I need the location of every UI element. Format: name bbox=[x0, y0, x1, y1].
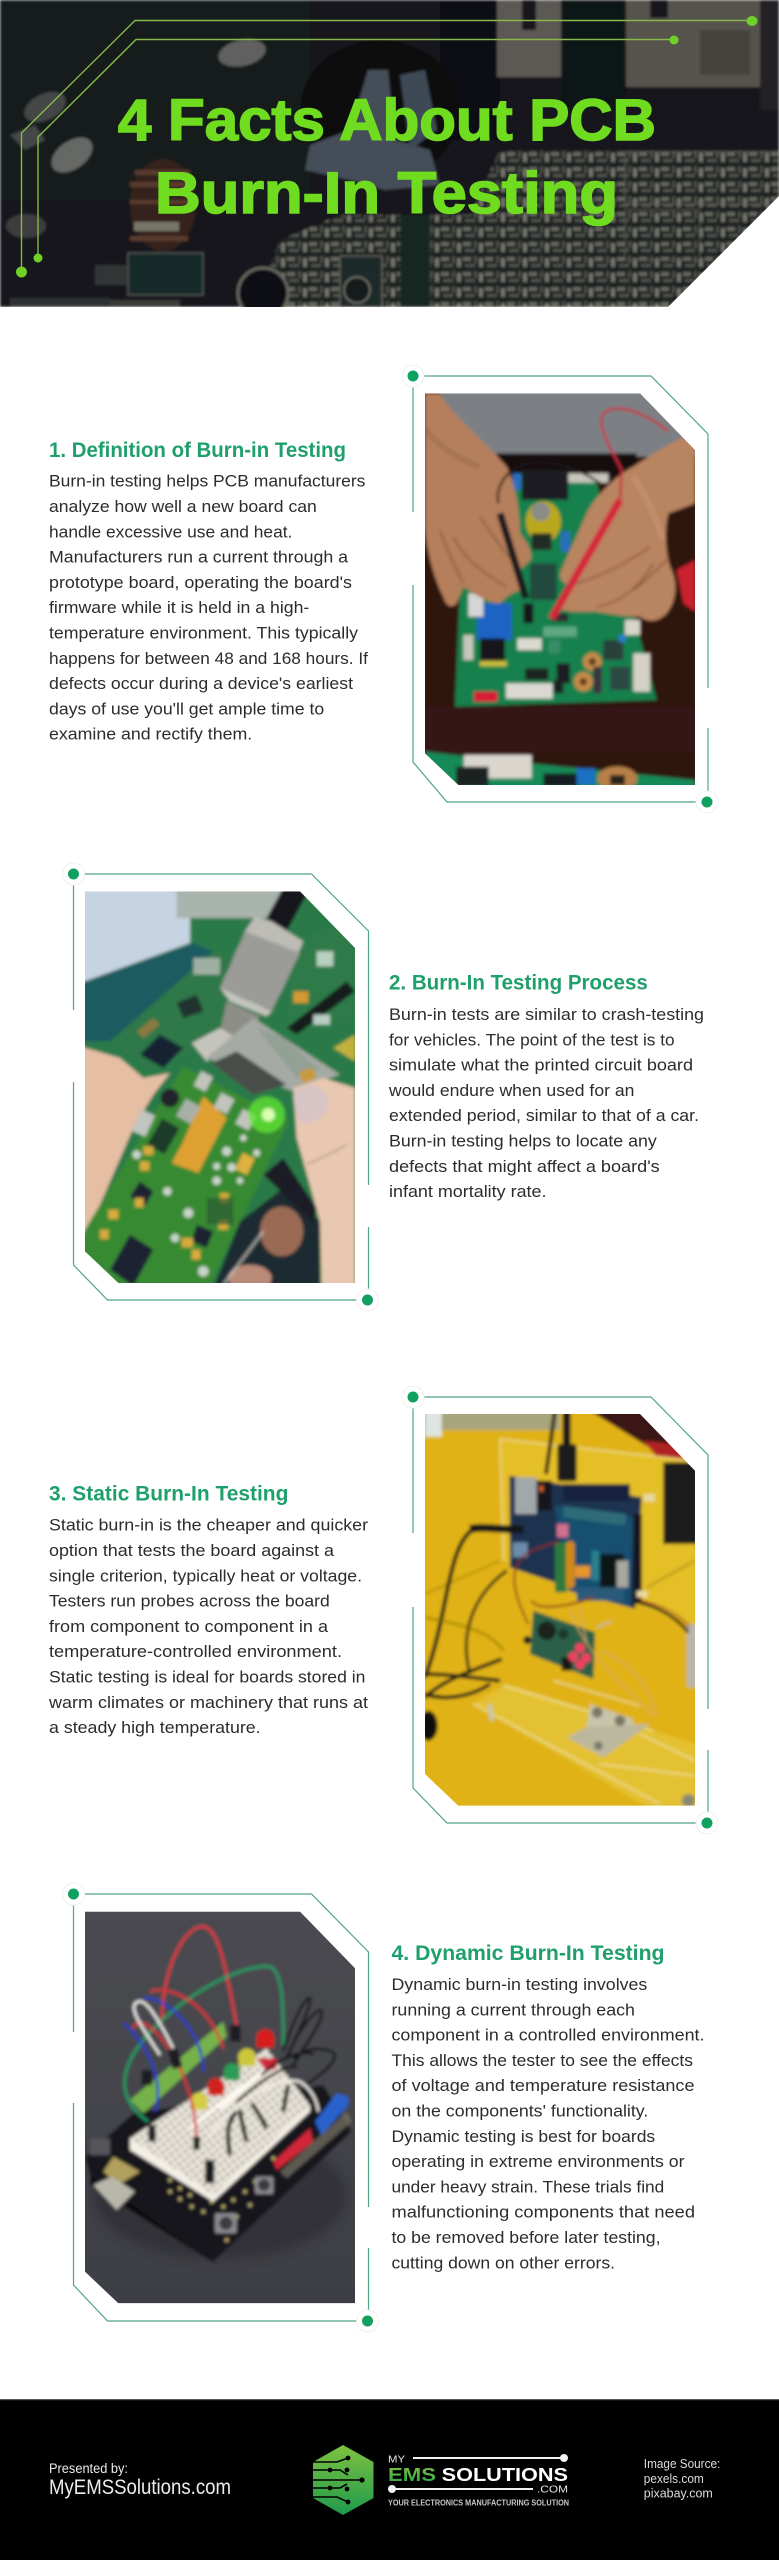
section 3 body text: Static testing is ideal for boards stored in bbox=[49, 1668, 365, 1686]
panel: section 3 static bbox=[48, 1386, 718, 1834]
section 4 body text: of voltage and temperature resistance bbox=[392, 2077, 694, 2095]
section 1 heading: 1. Definition of Burn-in Testing bbox=[49, 439, 346, 462]
section 4 body text bbox=[392, 1976, 704, 2272]
section 4 circuit frame bbox=[62, 1883, 378, 2332]
photo: test board mounted on acrylic over yellow surface bbox=[419, 1411, 700, 1811]
header circuit trace lines bbox=[22, 20, 752, 272]
tan wires bbox=[570, 1607, 656, 1716]
board bbox=[455, 473, 657, 707]
section 4 heading: 4. Dynamic Burn-In Testing bbox=[392, 1942, 664, 1965]
image source block: pexels.com bbox=[644, 2471, 704, 2486]
red probe bbox=[552, 500, 620, 618]
black wires right bbox=[237, 1998, 335, 2102]
logo wordmark: EMS bbox=[388, 2465, 436, 2485]
inductor coil bbox=[130, 159, 196, 251]
connector bbox=[277, 888, 297, 925]
section 2 body text bbox=[388, 1006, 704, 1201]
breadboard bbox=[130, 2048, 310, 2198]
logo icon: green hexagon with circuit traces bbox=[313, 2445, 374, 2515]
PCB bbox=[80, 1066, 288, 1288]
section 2 body text: infant mortality rate. bbox=[389, 1183, 546, 1201]
jumper connectors bbox=[230, 2025, 241, 2042]
image source block: Image Source: bbox=[644, 2456, 720, 2471]
section 2 body text: defects that might affect a board's bbox=[389, 1158, 660, 1176]
section 1 body text: analyze how well a new board can bbox=[49, 498, 317, 516]
section 3 body text: Testers run probes across the board bbox=[49, 1593, 330, 1611]
gold pads bbox=[168, 2156, 275, 2242]
section 1 body text bbox=[49, 473, 368, 744]
image source block bbox=[644, 2456, 720, 2501]
wires bbox=[162, 1927, 237, 2025]
lower board bbox=[425, 752, 695, 790]
title bbox=[118, 88, 656, 226]
header circuit board photo background bbox=[0, 0, 779, 318]
section 1 body text: examine and rectify them. bbox=[49, 726, 252, 744]
photo: hands probing green circuit board bbox=[420, 390, 700, 790]
metal bracket bbox=[587, 1704, 633, 1732]
black probe bbox=[500, 513, 526, 598]
left hand bbox=[80, 1046, 170, 1241]
section 4 body text: malfunctioning components that need bbox=[392, 2204, 695, 2222]
section 3 body text bbox=[48, 1517, 369, 1737]
LEDs bbox=[256, 2029, 274, 2047]
section 3 body text: temperature-controlled environment. bbox=[49, 1643, 342, 1661]
section 2 body text: for vehicles. The point of the test is to bbox=[389, 1031, 675, 1049]
section 3 body text: option that tests the board against a bbox=[49, 1542, 335, 1560]
logo bbox=[313, 2445, 569, 2515]
title: 4 Facts About PCB bbox=[118, 88, 656, 153]
section 4 body text: operating in extreme environments or bbox=[392, 2153, 685, 2171]
panel: section 4 dynamic bbox=[62, 1883, 704, 2332]
capacitors bbox=[216, 38, 268, 68]
section 2 heading: 2. Burn-In Testing Process bbox=[389, 971, 648, 994]
section 3 body text: warm climates or machinery that runs at bbox=[48, 1694, 368, 1712]
section 3 body text: a steady high temperature. bbox=[49, 1719, 261, 1737]
section 1 body text: Manufacturers run a current through a bbox=[49, 549, 349, 567]
section 4 body text: under heavy strain. These trials find bbox=[392, 2178, 664, 2196]
section 1 body text: defects occur during a device's earliest bbox=[49, 675, 353, 693]
section 3 heading: 3. Static Burn-In Testing bbox=[49, 1483, 288, 1506]
section 2 body text: Burn-in testing helps to locate any bbox=[389, 1132, 658, 1150]
panel: section 1 definition bbox=[49, 365, 718, 813]
presented by block bbox=[49, 2461, 231, 2499]
section 1 body text: temperature environment. This typically bbox=[49, 624, 359, 642]
terminal block bbox=[130, 2022, 227, 2113]
section 4 body text: to be removed before later testing, bbox=[392, 2229, 660, 2247]
image source block: pixabay.com bbox=[644, 2486, 713, 2501]
section 1 body text: firmware while it is held in a high- bbox=[49, 599, 309, 617]
section 4 body text: component in a controlled environment. bbox=[392, 2027, 704, 2045]
presented by block: Presented by: bbox=[49, 2461, 128, 2476]
section 3 body text: Static burn-in is the cheaper and quicker bbox=[49, 1517, 369, 1535]
thumb bbox=[293, 1078, 355, 1288]
photo: breadboard with LEDs and jumper wires bbox=[80, 1908, 360, 2308]
pcb bbox=[85, 2085, 352, 2262]
logo wordmark: .COM bbox=[537, 2485, 568, 2496]
multimeter bbox=[677, 560, 695, 612]
dark lower area bbox=[213, 1188, 320, 1288]
cables bbox=[470, 1528, 523, 1529]
photo: RF connector on hand-held circuit board bbox=[80, 888, 360, 1291]
small board bbox=[530, 1611, 595, 1679]
right hand bbox=[558, 433, 695, 621]
section 1 body text: prototype board, operating the board's bbox=[49, 574, 352, 592]
logo wordmark: YOUR ELECTRONICS MANUFACTURING SOLUTION bbox=[388, 2499, 569, 2508]
section 1 circuit frame bbox=[402, 365, 718, 813]
section 2 body text: simulate what the printed circuit board bbox=[389, 1057, 693, 1075]
section 4 body text: on the components' functionality. bbox=[392, 2102, 648, 2120]
section 4 body text: cutting down on other errors. bbox=[392, 2254, 615, 2272]
section 1 body text: handle excessive use and heat. bbox=[49, 523, 292, 541]
buttons bbox=[215, 2213, 237, 2233]
logo wordmark: MY bbox=[388, 2454, 405, 2466]
section 2 body text: would endure when used for an bbox=[388, 1082, 634, 1100]
housing bbox=[207, 1018, 340, 1091]
panel: section 2 process bbox=[62, 863, 704, 1311]
presented by block: MyEMSSolutions.com bbox=[49, 2476, 231, 2499]
left hand bbox=[425, 393, 531, 606]
title: Burn-In Testing bbox=[155, 161, 618, 226]
section 3 body text: single criterion, typically heat or voltage. bbox=[49, 1567, 362, 1585]
dense component area bbox=[255, 150, 779, 307]
header white corner cut bbox=[668, 196, 779, 307]
section 1 body text: Burn-in testing helps PCB manufacturers bbox=[49, 473, 365, 491]
connectors top right bbox=[497, 0, 561, 77]
section 1 body text: days of use you'll get ample time to bbox=[49, 700, 324, 718]
logo wordmark bbox=[388, 2454, 569, 2508]
section 1 body text: happens for between 48 and 168 hours. If bbox=[49, 650, 368, 668]
header strips bbox=[315, 2093, 348, 2135]
section 4 body text: This allows the tester to see the effects bbox=[392, 2052, 693, 2070]
acrylic base bbox=[473, 1684, 695, 1811]
USB cable bbox=[560, 1414, 573, 1448]
section 2 body text: extended period, similar to that of a car. bbox=[389, 1107, 699, 1125]
main board bbox=[509, 1476, 642, 1609]
section 4 body text: running a current through each bbox=[392, 2001, 635, 2019]
logo wordmark: SOLUTIONS bbox=[442, 2465, 568, 2485]
footer bar bbox=[0, 2399, 779, 2560]
header banner bbox=[0, 0, 779, 318]
section 3 body text: from component to component in a bbox=[49, 1618, 329, 1636]
section 2 circuit frame bbox=[62, 863, 378, 1311]
section 2 body text: Burn-in tests are similar to crash-testing bbox=[389, 1006, 704, 1024]
section 4 body text: Dynamic burn-in testing involves bbox=[392, 1976, 647, 1994]
section 4 body text: Dynamic testing is best for boards bbox=[392, 2128, 655, 2146]
section 3 circuit frame bbox=[402, 1386, 718, 1834]
blue grey plastic clips bbox=[305, 70, 440, 190]
black cable bundle bbox=[425, 1659, 502, 1697]
header trace end dots bbox=[16, 16, 758, 278]
